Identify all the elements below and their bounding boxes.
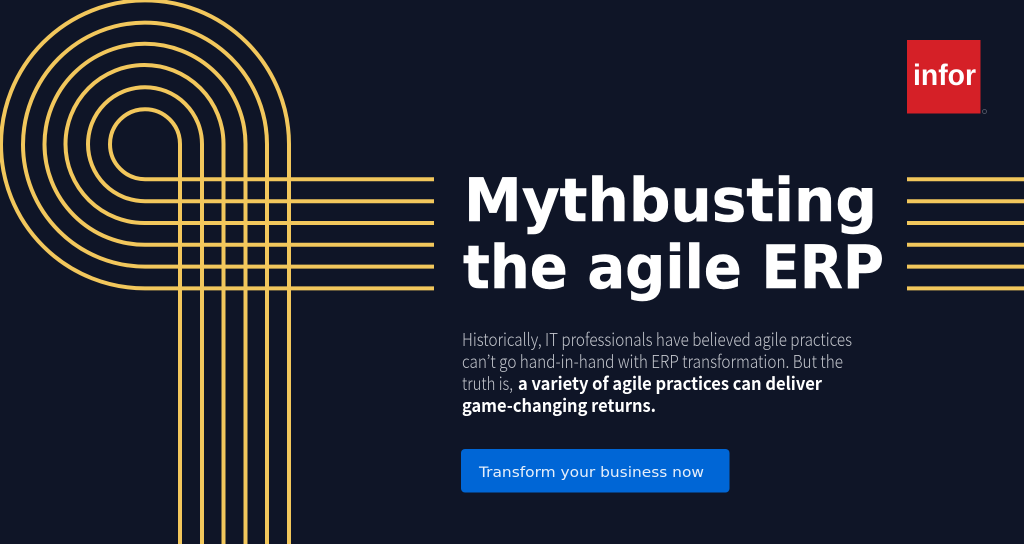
button: Transform your business now xyxy=(461,449,730,492)
intro paragraph xyxy=(462,327,852,418)
intro paragraph: can’t go hand-in-hand with ERP transformation. But the xyxy=(462,349,843,374)
button: Transform your business now: Transform your business now xyxy=(478,465,704,481)
concentric arch line pattern xyxy=(1,0,434,544)
infor logo: infor xyxy=(913,59,976,92)
title xyxy=(463,166,884,303)
intro paragraph: truth is, xyxy=(462,371,513,396)
intro paragraph: game-changing returns. xyxy=(462,393,656,418)
title: Mythbusting xyxy=(464,166,877,236)
intro paragraph: Historically, IT professionals have believed agile practices xyxy=(462,327,852,352)
intro paragraph: a variety of agile practices can deliver xyxy=(518,371,822,396)
title: the agile ERP xyxy=(463,233,884,303)
infor logo xyxy=(907,40,986,114)
right side horizontal lines xyxy=(907,179,1024,288)
